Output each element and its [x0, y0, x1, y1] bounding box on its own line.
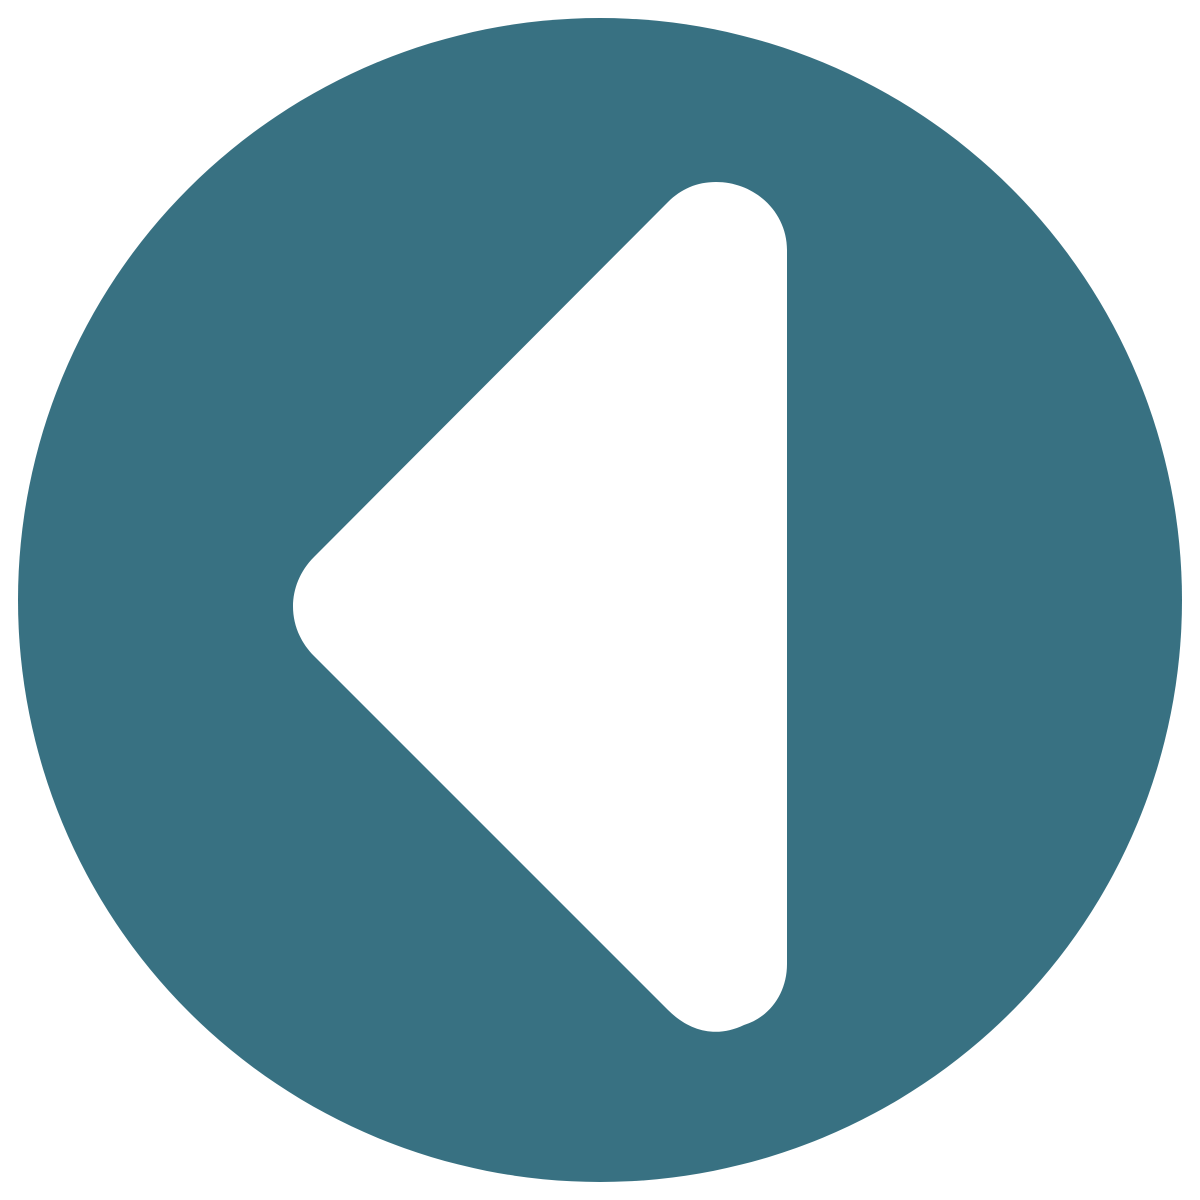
- left-pointing rounded triangle: [293, 182, 787, 1032]
